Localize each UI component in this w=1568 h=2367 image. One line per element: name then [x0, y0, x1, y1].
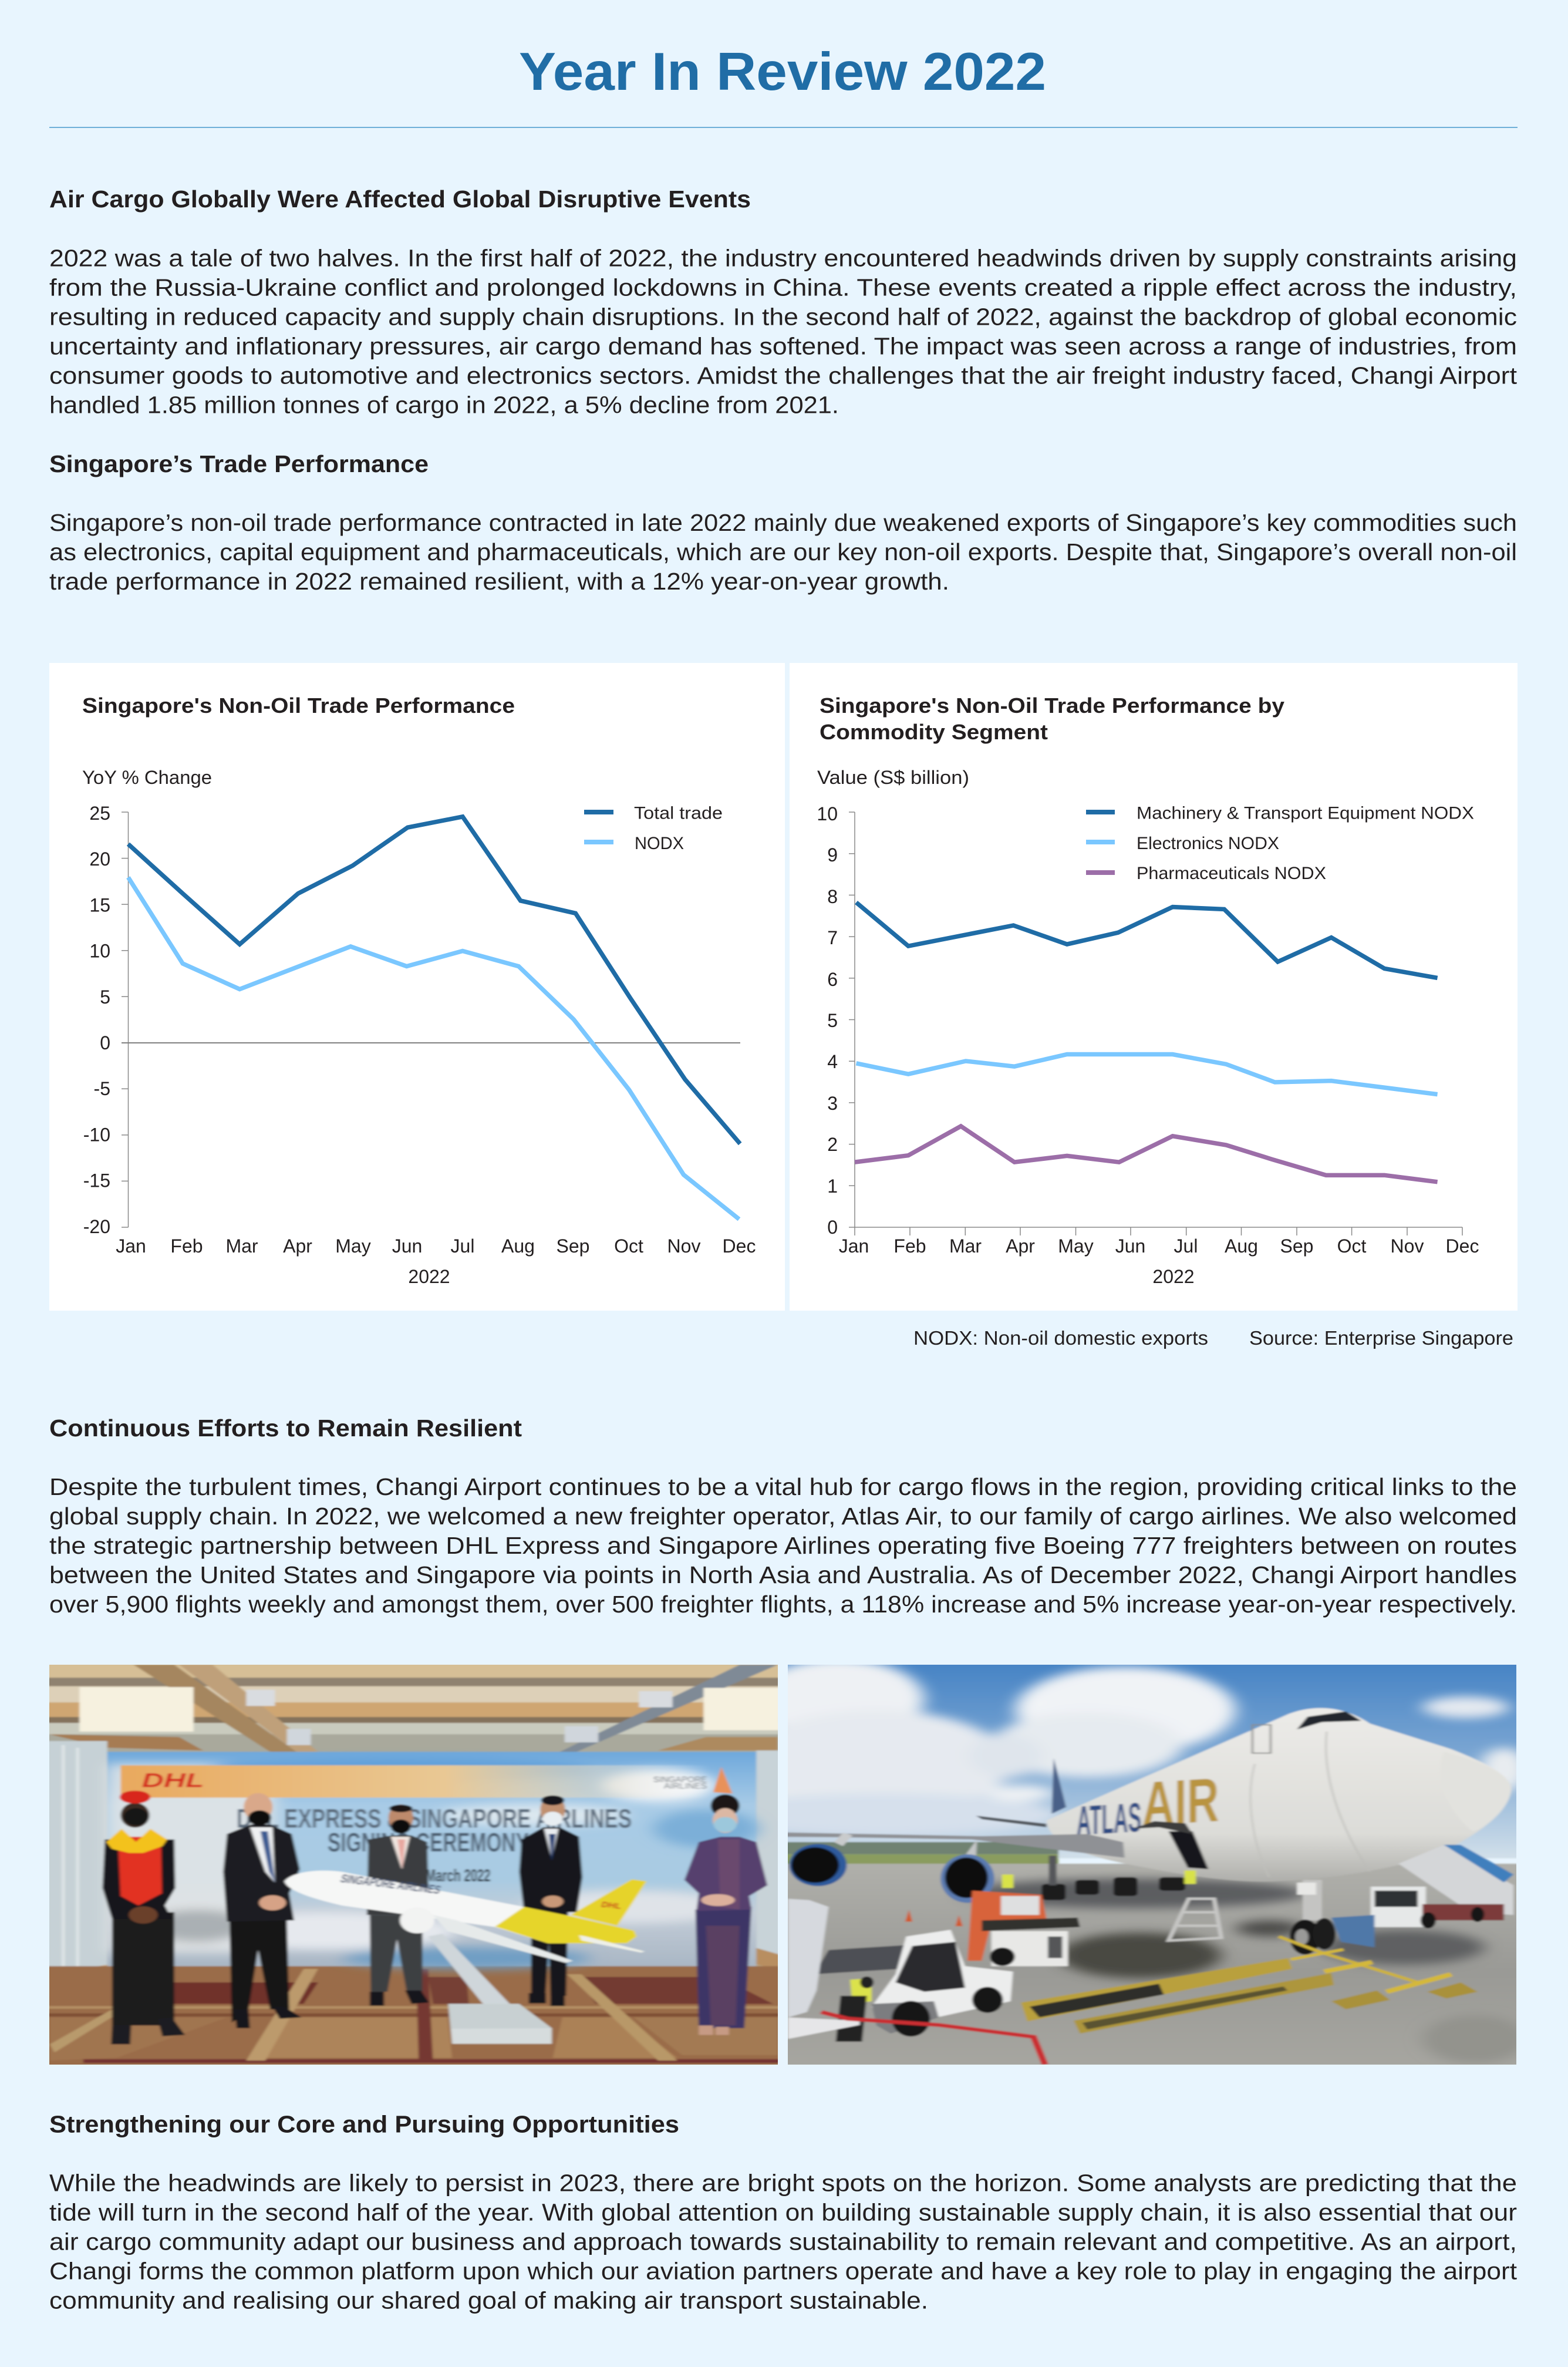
y-axis labels: 0: [100, 1032, 110, 1053]
y-axis labels: -20: [83, 1216, 110, 1237]
orange cargo loader: [967, 1874, 1080, 1966]
cargo door: [1169, 1831, 1208, 1869]
text block: air cargo: uncertainty and inflationary pressures, air cargo demand has softened. The impact was seen across a range of industries, from: [49, 332, 1517, 359]
livery wordmark: AIR: [1142, 1765, 1219, 1839]
text block: continuous efforts: the strategic partnership between DHL Express and Singapore Airlines operating five Boeing 777 freighters between on routes: [49, 1532, 1517, 1559]
x-axis labels: May: [335, 1235, 371, 1257]
y-axis labels: -15: [83, 1170, 110, 1191]
title: Year In Review 2022: [519, 42, 1046, 102]
chart title: Singapore's Non-Oil Trade Performance by: [820, 693, 1284, 718]
photo: Atlas Air freighter on the apron: [788, 1665, 1516, 2065]
text block: continuous efforts: between the United States and Singapore via points in North Asia and Australia. As of December 2022, Changi Airport handles: [49, 1561, 1517, 1588]
text block: air cargo: resulting in reduced capacity and supply chain disruptions. In the second half of 2022, against the backdrop of global economic: [49, 303, 1517, 330]
text block: air cargo: 2022 was a tale of two halves. In the first half of 2022, the industry encountered headwinds driven by supply constraints arising: [49, 244, 1517, 271]
text block: trade performance: trade performance in 2022 remained resilient, with a 12% year-on-year growth.: [49, 568, 949, 595]
line: machinery: [857, 903, 1438, 978]
x-axis labels: Aug: [1225, 1235, 1258, 1257]
x-axis labels: Sep: [557, 1235, 589, 1257]
x-axis labels: Mar: [225, 1235, 258, 1257]
axes: [849, 812, 1462, 1235]
legend: [584, 803, 723, 853]
y-axis labels: 5: [100, 986, 110, 1008]
text block: strengthening: tide will turn in the second half of the year. With global attention on building sustainable supply chain, it is also essential that our: [49, 2198, 1517, 2225]
plane model: DHL: [600, 1900, 623, 1911]
engines: [789, 1844, 994, 1903]
x-axis labels: Oct: [614, 1235, 643, 1257]
x-axis labels: Mar: [949, 1235, 982, 1257]
text block: strengthening: community and realising our shared goal of making air transport sustainable.: [49, 2287, 928, 2314]
tail and far wing: [1052, 1758, 1066, 1814]
text block: trade performance: [49, 509, 1517, 595]
x-axis labels: Nov: [1391, 1235, 1424, 1257]
y-axis labels: -5: [94, 1078, 110, 1099]
forklift tug: [872, 1930, 1013, 2036]
backdrop wording: SIGNING CEREMONY: [328, 1827, 529, 1857]
logos: [141, 1767, 732, 1793]
text block: continuous efforts: global supply chain. In 2022, we welcomed a new freighter operator, Atlas Air, to our family of cargo airlines. We also welcomed: [49, 1503, 1517, 1530]
wing: [771, 1832, 1125, 1858]
y-axis labels: 0: [827, 1217, 838, 1238]
axis label: YoY % Change: [82, 767, 212, 788]
x-axis labels: Jun: [392, 1235, 422, 1257]
y-axis labels: [817, 803, 838, 1238]
photo: DHL and Singapore Airlines signing ceremony: [49, 1665, 778, 2065]
logos: DHL: [141, 1769, 204, 1792]
y-axis labels: 3: [827, 1093, 838, 1114]
x-axis labels: Feb: [893, 1235, 926, 1257]
red line: [821, 2012, 1045, 2065]
y-axis labels: 25: [89, 803, 110, 824]
tree line and grass: [771, 1842, 1058, 1854]
y-axis labels: 7: [827, 927, 838, 948]
y-axis labels: 9: [827, 844, 838, 866]
y-axis labels: -10: [83, 1124, 110, 1145]
backdrop wording: DHL EXPRESS & SINGAPORE AIRLINES: [237, 1803, 632, 1833]
y-axis labels: [83, 803, 110, 1237]
puddle: [1331, 1915, 1374, 1947]
livery wordmark: ATLAS: [1077, 1794, 1141, 1844]
pallet and container: [814, 1945, 915, 1974]
ground handler: [836, 1977, 874, 2042]
y-axis labels: 2: [827, 1134, 838, 1155]
legend: [1086, 803, 1474, 883]
fuselage: [1047, 1708, 1511, 1882]
text block: trade performance: as electronics, capital equipment and pharmaceuticals, which are our key non-oil exports. Despite that, Singapore’s overall non-oil: [49, 538, 1517, 565]
heading: continuous efforts: Continuous Efforts to Remain Resilient: [49, 1415, 522, 1442]
y-axis labels: 1: [827, 1176, 838, 1197]
x-axis labels: Jul: [451, 1235, 474, 1257]
x-axis labels: May: [1058, 1235, 1094, 1257]
cones: [905, 1910, 912, 1922]
text block: strengthening: While the headwinds are likely to persist in 2023, there are bright spots on the horizon. Some analysts are predicting that the: [49, 2169, 1517, 2196]
backdrop: [107, 1752, 756, 1966]
plane model: [285, 1871, 646, 2044]
x-axis labels: Nov: [667, 1235, 700, 1257]
backdrop wording: [237, 1803, 632, 1885]
line: NODX: [128, 877, 739, 1219]
text block: air cargo: [49, 244, 1518, 418]
x-axis labels: Jan: [116, 1235, 146, 1257]
chart footnote: Source: Enterprise Singapore: [1249, 1327, 1513, 1349]
mobile stairs: [1169, 1899, 1221, 1941]
y-axis labels: 8: [827, 886, 838, 907]
x-axis labels: Apr: [1006, 1235, 1035, 1257]
text block: trade performance: Singapore’s non-oil trade performance contracted in late 2022 mainly due weakened exports of Singapore’s key commodities such: [49, 509, 1517, 536]
logos: AIRLINES: [664, 1781, 707, 1790]
axes: [122, 812, 740, 1227]
livery wordmark: [1077, 1765, 1219, 1844]
apron: [771, 1864, 1537, 2079]
text block: air cargo: consumer goods to automotive and electronics sectors. Amidst the challenges that the air freight industry faced, Changi Airport: [49, 362, 1518, 389]
text block: air cargo: from the Russia-Ukraine conflict and prolonged lockdowns in China. These events created a ripple effect across the industry,: [49, 274, 1517, 301]
stair truck: [1371, 1845, 1513, 1928]
text block: strengthening: [49, 2169, 1518, 2314]
x-axis labels: Jan: [839, 1235, 869, 1257]
y-axis labels: 10: [817, 803, 838, 824]
text block: strengthening: Changi forms the common platform upon which our aviation partners operate and have a key role to play in engaging the airport: [49, 2257, 1518, 2284]
text block: continuous efforts: Despite the turbulent times, Changi Airport continues to be a vital hub for cargo flows in the region, providing critical links to the: [49, 1473, 1517, 1500]
x-axis labels: 2022: [408, 1266, 450, 1287]
x-axis labels: Sep: [1280, 1235, 1313, 1257]
chart title: Commodity Segment: [820, 720, 1048, 744]
heading: air cargo: Air Cargo Globally Were Affected Global Disruptive Events: [49, 186, 751, 213]
text block: continuous efforts: over 5,900 flights weekly and amongst them, over 500 freighter flights, a 118% increase and 5% increase year-on-year respectively.: [49, 1591, 1517, 1618]
ceiling: [12, 1642, 826, 1753]
x-axis labels: [839, 1235, 1479, 1287]
legend: NODX: [635, 834, 684, 853]
x-axis labels: Jul: [1174, 1235, 1198, 1257]
walls: [45, 1741, 107, 1992]
x-axis labels: Aug: [501, 1235, 535, 1257]
line: total trade: [128, 817, 740, 1144]
y-axis labels: 5: [827, 1010, 838, 1031]
text block: air cargo: handled 1.85 million tonnes of cargo in 2022, a 5% decline from 2021.: [49, 391, 839, 418]
line: pharmaceuticals: [855, 1126, 1438, 1182]
x-axis labels: [116, 1235, 756, 1287]
legend: Total trade: [634, 803, 723, 823]
nose gear: [1290, 1880, 1336, 1955]
chart title: [820, 693, 1284, 744]
y-axis labels: 6: [827, 969, 838, 990]
axis label: Value (S$ billion): [817, 767, 969, 788]
heading: strengthening: Strengthening our Core and Pursuing Opportunities: [49, 2110, 679, 2137]
legend: Electronics NODX: [1137, 834, 1279, 853]
x-axis labels: Apr: [283, 1235, 312, 1257]
plane model: SINGAPORE AIRLINES: [339, 1873, 443, 1897]
x-axis labels: Jun: [1115, 1235, 1145, 1257]
people: [103, 1790, 767, 2045]
chart footnote: [913, 1327, 1513, 1349]
chart title: Singapore's Non-Oil Trade Performance: [82, 693, 515, 718]
floor: [26, 1966, 792, 2074]
x-axis labels: Dec: [723, 1235, 756, 1257]
panel: YoY line chart: [49, 663, 785, 1311]
x-axis labels: Feb: [170, 1235, 203, 1257]
chart footnote: NODX: Non-oil domestic exports: [913, 1327, 1208, 1349]
y-axis labels: 20: [89, 849, 110, 870]
fuselage underside gear: [1041, 1856, 1185, 1900]
x-axis labels: 2022: [1152, 1266, 1195, 1287]
legend: Pharmaceuticals NODX: [1137, 864, 1326, 883]
clouds: [714, 1659, 1528, 1837]
y-axis labels: 4: [827, 1051, 838, 1072]
heading: trade performance: Singapore’s Trade Performance: [49, 450, 429, 477]
text block: strengthening: air cargo community adapt our business and approach towards sustainability to remain relevant and competitive. As an airport,: [49, 2228, 1517, 2255]
panel: commodity line chart: [790, 663, 1518, 1311]
yellow stand markings: [1021, 1937, 1478, 2033]
legend: Machinery & Transport Equipment NODX: [1137, 803, 1474, 823]
text block: continuous efforts: [49, 1473, 1517, 1618]
line: electronics: [857, 1055, 1438, 1095]
y-axis labels: 15: [89, 895, 110, 916]
logos: SINGAPORE: [653, 1775, 707, 1784]
backdrop wording: March 2022: [426, 1866, 490, 1885]
x-axis labels: Dec: [1446, 1235, 1479, 1257]
x-axis labels: Oct: [1337, 1235, 1367, 1257]
y-axis labels: 10: [89, 941, 110, 962]
